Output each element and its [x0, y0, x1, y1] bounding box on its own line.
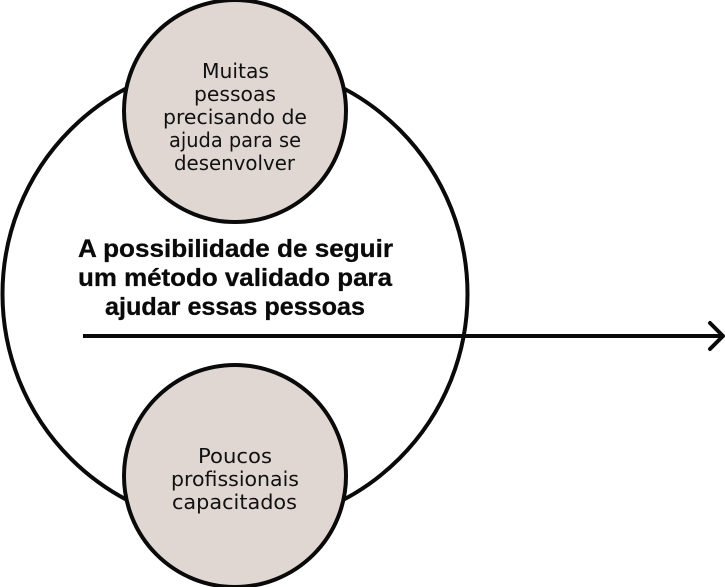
top circle: many people needing help: pessoas	[194, 82, 276, 106]
top circle: many people needing help: ajuda para se	[169, 128, 301, 152]
central bold statement: um método validado para	[78, 264, 393, 292]
bottom circle: few trained professionals	[124, 365, 346, 587]
top circle: many people needing help: Muitas	[202, 59, 269, 83]
large outline circle	[2, 62, 468, 526]
central bold statement: A possibilidade de seguir	[78, 235, 393, 263]
bottom circle: few trained professionals: profissionais	[171, 467, 299, 491]
bottom circle: few trained professionals: capacitados	[172, 490, 297, 514]
bottom circle: few trained professionals: Poucos	[198, 444, 272, 468]
central bold statement: ajudar essas pessoas	[105, 293, 365, 321]
arrow	[83, 323, 723, 349]
top circle: many people needing help: precisando de	[163, 105, 307, 129]
central bold statement	[78, 235, 393, 321]
top circle: many people needing help: desenvolver	[174, 151, 296, 175]
top circle: many people needing help	[124, 0, 346, 222]
